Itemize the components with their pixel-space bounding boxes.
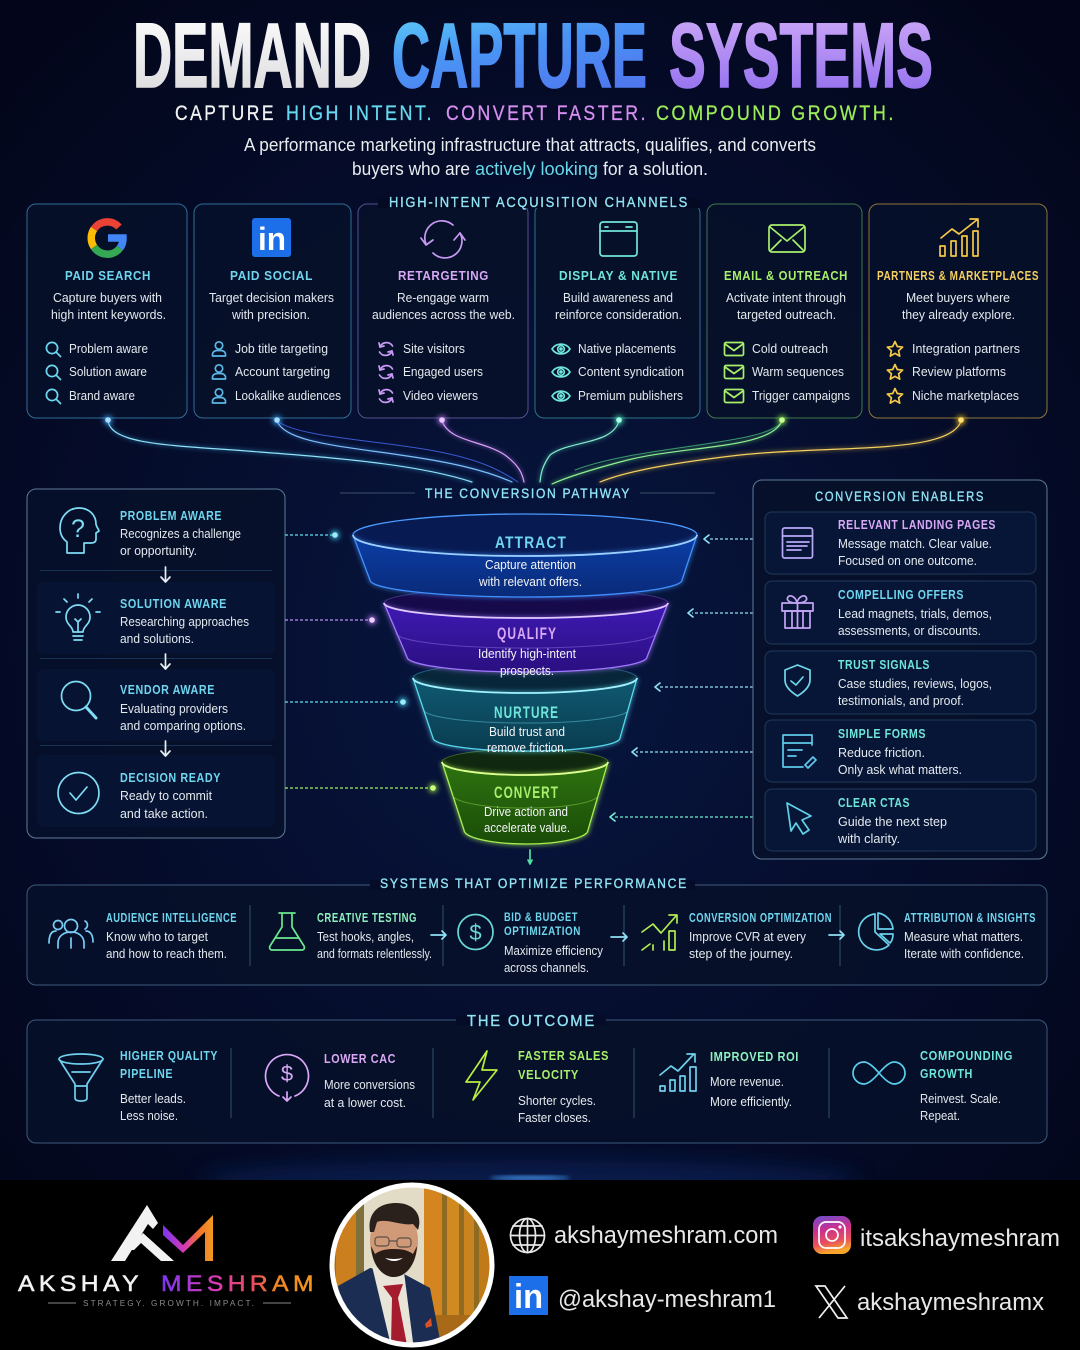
system: bid and budget: $ <box>469 920 482 945</box>
outcome: higher quality pipeline: HIGHER QUALITY <box>120 1049 218 1063</box>
stage: problem aware: or opportunity. <box>120 544 197 558</box>
footer band <box>0 1180 1080 1350</box>
outcome: improved roi: More efficiently. <box>710 1095 792 1109</box>
portrait photo <box>330 1183 495 1350</box>
heading: CONVERSION ENABLERS <box>815 488 985 504</box>
list: Native placements <box>578 342 676 356</box>
system: attribution and insights: Iterate with confidence. <box>904 947 1024 961</box>
list <box>887 342 1020 403</box>
icon: google <box>91 222 123 254</box>
funnel label: attract: with relevant offers. <box>478 575 582 589</box>
connector dots on channel cards <box>104 416 965 424</box>
icon: retarget loop <box>421 221 465 258</box>
system: attribution and insights <box>859 911 1036 961</box>
list <box>379 342 483 403</box>
icon: linkedin: in <box>258 221 286 257</box>
arrow <box>161 654 170 669</box>
description <box>209 291 334 322</box>
heading: RETARGETING <box>398 269 489 283</box>
system: bid and budget <box>458 912 604 975</box>
list: Job title targeting <box>235 342 328 356</box>
list: Niche marketplaces <box>912 389 1019 403</box>
wordmark: AKSHAY <box>18 1271 143 1296</box>
panel: email and outreach <box>707 204 862 418</box>
stage: problem aware: Recognizes a challenge <box>120 527 241 541</box>
arrow <box>829 931 844 939</box>
description: Capture buyers with <box>53 291 162 305</box>
stage: solution aware: and solutions. <box>120 632 194 646</box>
description: for a solution. <box>603 159 708 179</box>
funnel label: convert: CONVERT <box>494 783 559 802</box>
funnel label: attract: ATTRACT <box>495 533 567 552</box>
description <box>555 291 682 322</box>
enabler: landing pages: Focused on one outcome. <box>838 554 977 568</box>
funnel label: convert <box>484 783 570 835</box>
stage: problem aware <box>60 508 241 558</box>
stage: vendor aware: VENDOR AWARE <box>120 683 215 697</box>
funnel label: nurture: remove friction. <box>487 741 567 755</box>
system: creative testing: CREATIVE TESTING <box>317 911 417 925</box>
stage: decision ready: and take action. <box>120 807 208 821</box>
contact: x <box>816 1286 1044 1318</box>
arrow <box>161 741 170 756</box>
list <box>552 342 684 403</box>
outcome: higher quality pipeline: Better leads. <box>120 1092 186 1106</box>
description: Re-engage warm <box>397 291 489 305</box>
system: conversion optimization: step of the journey. <box>689 947 793 961</box>
funnel label: nurture: NURTURE <box>494 703 559 722</box>
logo: akshay meshram <box>18 1205 318 1308</box>
tagline: CAPTURE <box>175 102 276 125</box>
system: audience intelligence: AUDIENCE INTELLIGENCE <box>106 911 237 925</box>
description: A performance marketing infrastructure that attracts, qualifies, and converts <box>244 135 816 155</box>
list: Lookalike audiences <box>235 389 341 403</box>
enabler: trust signals: testimonials, and proof. <box>838 694 964 708</box>
right connectors from enablers <box>610 535 753 821</box>
panel: paid search <box>27 204 187 418</box>
heading: PAID SOCIAL <box>230 269 313 283</box>
contact: linkedin: in <box>514 1278 543 1316</box>
panel: retargeting <box>358 204 528 418</box>
list: Problem aware <box>69 342 148 356</box>
heading: conversion pathway: THE CONVERSION PATHWAY <box>425 485 631 501</box>
enabler: clear ctas <box>765 789 1036 851</box>
funnel label: nurture <box>487 703 567 755</box>
contact: instagram <box>813 1216 1060 1254</box>
system: creative testing: Test hooks, angles, <box>317 930 414 944</box>
outcome: improved roi <box>660 1050 799 1109</box>
list: Video viewers <box>403 389 478 403</box>
enabler: simple forms <box>765 720 1036 782</box>
description <box>902 291 1015 322</box>
contact: instagram: itsakshaymeshram <box>860 1225 1060 1252</box>
list: Premium publishers <box>578 389 683 403</box>
description: buyers who are <box>352 159 470 179</box>
icon: envelope <box>769 225 805 252</box>
arrow <box>161 567 170 582</box>
panel: conversion enablers <box>753 480 1047 859</box>
description <box>726 291 846 322</box>
description <box>244 135 816 179</box>
funnel label: convert: Drive action and <box>484 805 568 819</box>
funnel label: qualify <box>478 624 576 678</box>
stage: solution aware: SOLUTION AWARE <box>120 597 227 611</box>
description: high intent keywords. <box>51 308 166 322</box>
enabler: clear ctas: CLEAR CTAS <box>838 796 910 810</box>
arrow <box>611 933 627 941</box>
description: audiences across the web. <box>372 308 515 322</box>
description <box>51 291 166 322</box>
outcome: lower cac <box>266 1052 415 1110</box>
heading: PARTNERS & MARKETPLACES <box>877 269 1039 283</box>
enabler: compelling offers: assessments, or discounts. <box>838 624 981 638</box>
outcome: higher quality pipeline: Less noise. <box>120 1109 178 1123</box>
outcome: compounding growth: Reinvest. Scale. <box>920 1092 1001 1106</box>
funnel layer: convert <box>442 749 608 844</box>
enabler: compelling offers: COMPELLING OFFERS <box>838 588 964 602</box>
list: Site visitors <box>403 342 465 356</box>
funnel chart <box>353 514 697 844</box>
list <box>46 342 148 404</box>
panel: the outcome <box>27 1013 1047 1143</box>
contact: x: akshaymeshramx <box>857 1289 1044 1316</box>
outcome: compounding growth: COMPOUNDING <box>920 1049 1013 1063</box>
stage: solution aware <box>56 594 249 646</box>
list <box>212 342 341 403</box>
outcome: higher quality pipeline <box>59 1049 218 1123</box>
list: Engaged users <box>403 365 483 379</box>
panel: paid social <box>194 204 351 418</box>
title <box>133 5 933 107</box>
heading: EMAIL & OUTREACH <box>724 269 848 283</box>
funnel layer: qualify <box>384 588 668 672</box>
description: Target decision makers <box>209 291 334 305</box>
contact: linkedin: @akshay-meshram1 <box>558 1286 776 1313</box>
contact: website: akshaymeshram.com <box>554 1222 778 1249</box>
list: Account targeting <box>235 365 330 379</box>
system: audience intelligence <box>49 911 237 961</box>
icon: AM mark <box>111 1205 213 1261</box>
description: actively looking <box>475 159 598 179</box>
heading: SYSTEMS THAT OPTIMIZE PERFORMANCE <box>380 875 688 891</box>
list: Content syndication <box>578 365 684 379</box>
system: creative testing <box>270 911 432 961</box>
system: conversion optimization: CONVERSION OPTIMIZATION <box>689 911 832 925</box>
description: targeted outreach. <box>737 308 836 322</box>
wordmark <box>18 1271 318 1296</box>
enabler: simple forms: Only ask what matters. <box>838 763 962 777</box>
system: audience intelligence: Know who to target <box>106 930 208 944</box>
wordmark: MESHRAM <box>161 1271 318 1296</box>
contact: website <box>510 1218 778 1252</box>
description: Build awareness and <box>563 291 673 305</box>
outcome: improved roi: IMPROVED ROI <box>710 1050 799 1064</box>
system: bid and budget: BID & BUDGET <box>504 912 578 924</box>
enabler: landing pages <box>765 512 1036 574</box>
outcome: compounding growth: Repeat. <box>920 1109 960 1123</box>
enabler: compelling offers: Lead magnets, trials, demos, <box>838 607 992 621</box>
outcome: lower cac: More conversions <box>324 1078 415 1092</box>
outcome: lower cac: at a lower cost. <box>324 1096 406 1110</box>
outcome: lower cac: $ <box>281 1061 293 1086</box>
funnel label: convert: accelerate value. <box>484 821 570 835</box>
panel: systems that optimize performance <box>27 875 1047 985</box>
icon: growth chart <box>940 219 978 256</box>
title: DEMAND <box>133 5 371 107</box>
list: Solution aware <box>69 365 147 379</box>
enabler: trust signals <box>765 651 1036 714</box>
outcome: faster sales velocity: Shorter cycles. <box>518 1094 596 1108</box>
enabler: clear ctas: Guide the next step <box>838 815 947 829</box>
list: Warm sequences <box>752 365 844 379</box>
funnel label: attract: Capture attention <box>485 558 576 572</box>
tagline: CONVERT FASTER. <box>446 102 648 125</box>
outcome: faster sales velocity: FASTER SALES <box>518 1049 609 1063</box>
system: conversion optimization <box>642 911 832 961</box>
icon: linkedin <box>252 218 291 257</box>
funnel layer: nurture <box>413 663 637 751</box>
stage: problem aware: ? <box>71 515 85 543</box>
system: attribution and insights: ATTRIBUTION & INSIGHTS <box>904 911 1036 925</box>
enabler: trust signals: Case studies, reviews, logos, <box>838 677 992 691</box>
heading: PAID SEARCH <box>65 269 151 283</box>
enabler: compelling offers <box>765 581 1036 644</box>
heading: acquisition channels: HIGH-INTENT ACQUISITION CHANNELS <box>389 194 689 211</box>
description: they already explore. <box>902 308 1015 322</box>
system: creative testing: and formats relentlessly. <box>317 947 432 961</box>
stage: decision ready: Ready to commit <box>120 789 213 803</box>
panel: partners and marketplaces <box>869 204 1047 418</box>
tagline: COMPOUND GROWTH. <box>656 102 896 125</box>
system: bid and budget: OPTIMIZATION <box>504 926 581 938</box>
enabler: landing pages: Message match. Clear value. <box>838 537 992 551</box>
funnel layer: attract <box>353 514 697 597</box>
list: Brand aware <box>69 389 135 403</box>
outcome: faster sales velocity: VELOCITY <box>518 1068 579 1082</box>
list: Cold outreach <box>752 342 828 356</box>
funnel label: attract <box>478 533 582 589</box>
funnel label: nurture: Build trust and <box>489 725 565 739</box>
tagline <box>175 102 896 125</box>
stage: vendor aware <box>62 682 246 733</box>
outcome: improved roi: More revenue. <box>710 1075 784 1089</box>
description <box>372 291 515 322</box>
list: Review platforms <box>912 365 1006 379</box>
stage: decision ready: DECISION READY <box>120 771 221 785</box>
title: CAPTURE <box>392 5 647 107</box>
stage: problem aware: PROBLEM AWARE <box>120 509 222 523</box>
arrow: funnel to systems <box>528 850 532 864</box>
system: audience intelligence: and how to reach them. <box>106 947 227 961</box>
description: reinforce consideration. <box>555 308 682 322</box>
enabler: simple forms: Reduce friction. <box>838 746 925 760</box>
enabler: clear ctas: with clarity. <box>837 832 900 846</box>
heading: THE OUTCOME <box>467 1013 596 1030</box>
stage: solution aware: Researching approaches <box>120 615 249 629</box>
icon: browser window <box>600 222 637 256</box>
system: bid and budget: across channels. <box>504 961 589 975</box>
outcome: compounding growth: GROWTH <box>920 1067 973 1081</box>
system: conversion optimization: Improve CVR at every <box>689 930 807 944</box>
contact: linkedin <box>509 1276 776 1316</box>
list: Integration partners <box>912 342 1020 356</box>
outcome: lower cac: LOWER CAC <box>324 1052 396 1066</box>
outcome: compounding growth <box>853 1049 1013 1123</box>
logo tagline: STRATEGY. GROWTH. IMPACT. <box>83 1299 256 1308</box>
panel: display and native <box>535 204 700 418</box>
funnel label: qualify: Identify high-intent <box>478 647 576 661</box>
tagline: HIGH INTENT. <box>286 102 434 125</box>
stage: vendor aware: and comparing options. <box>120 719 246 733</box>
enabler: simple forms: SIMPLE FORMS <box>838 727 926 741</box>
description: with precision. <box>231 308 310 322</box>
heading: DISPLAY & NATIVE <box>559 269 678 283</box>
system: bid and budget: Maximize efficiency <box>504 944 604 958</box>
enabler: trust signals: TRUST SIGNALS <box>838 658 930 672</box>
outcome: faster sales velocity: Faster closes. <box>518 1111 591 1125</box>
list <box>724 342 850 403</box>
stage: decision ready <box>58 771 221 821</box>
outcome: faster sales velocity <box>466 1049 609 1125</box>
enabler: landing pages: RELEVANT LANDING PAGES <box>838 518 996 532</box>
arrow <box>431 931 446 939</box>
stage: vendor aware: Evaluating providers <box>120 702 228 716</box>
outcome: higher quality pipeline: PIPELINE <box>120 1067 173 1081</box>
system: attribution and insights: Measure what matters. <box>904 930 1023 944</box>
description: Meet buyers where <box>906 291 1010 305</box>
list: Trigger campaigns <box>752 389 850 403</box>
flow lines from channels into funnel <box>108 421 961 484</box>
description: Activate intent through <box>726 291 846 305</box>
funnel label: qualify: QUALIFY <box>497 624 557 643</box>
funnel label: qualify: prospects. <box>500 664 554 678</box>
left connectors to funnel <box>285 531 437 792</box>
panel: buyer awareness stages <box>27 489 285 838</box>
